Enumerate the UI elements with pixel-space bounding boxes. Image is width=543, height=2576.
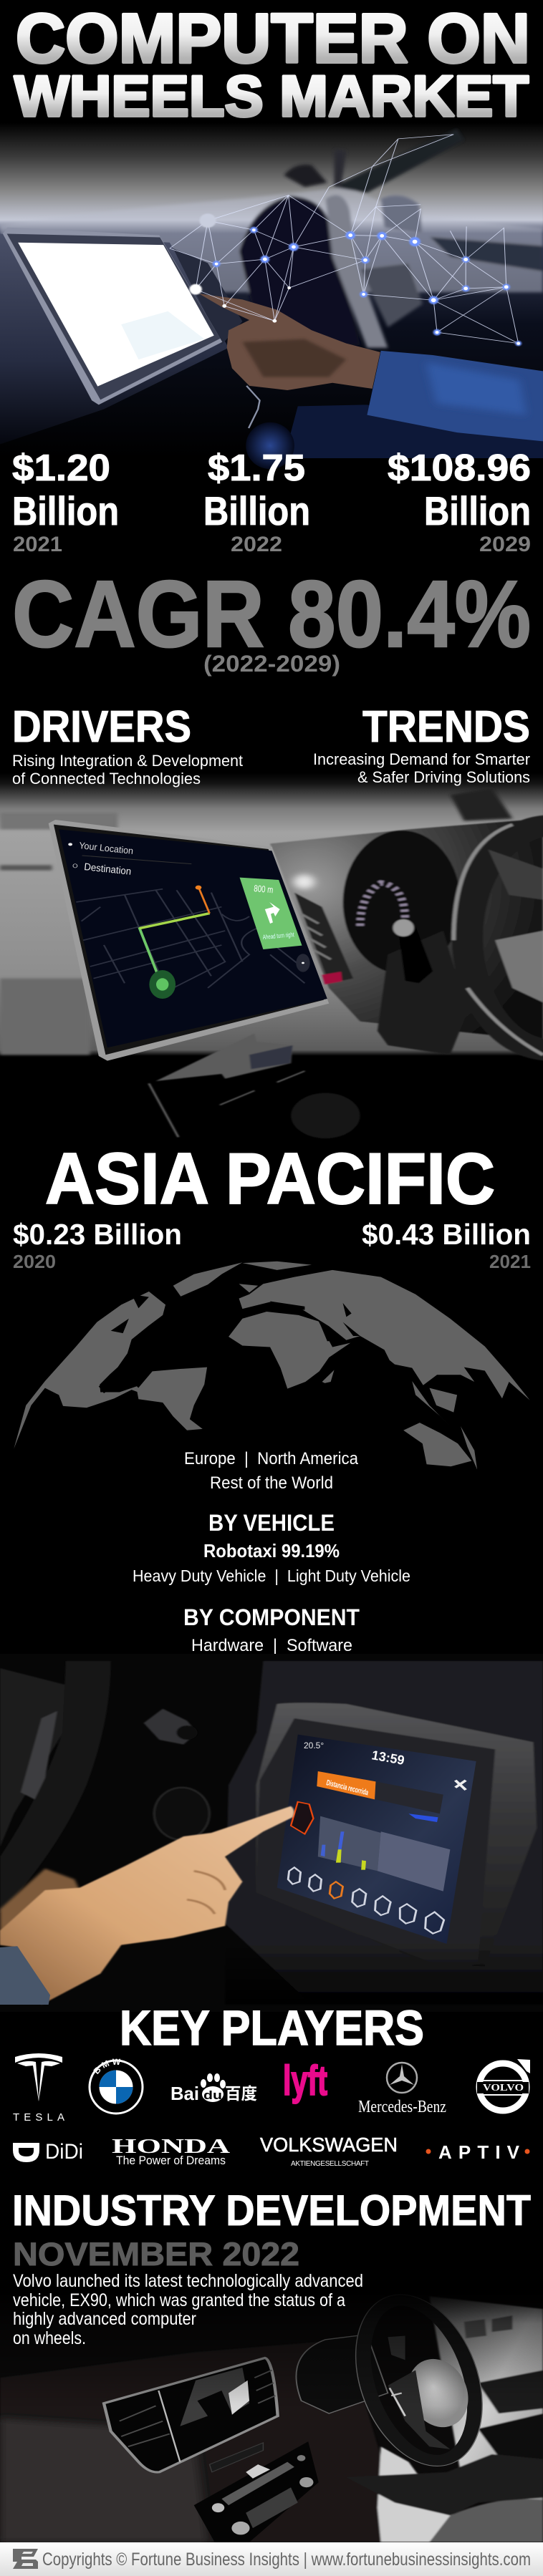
logo: Volkswagen xyxy=(260,2134,398,2168)
trends: Increasing Demand for Smarter xyxy=(313,750,530,768)
lower fade xyxy=(225,1942,543,2005)
development description: on wheels. xyxy=(13,2328,86,2348)
door panel xyxy=(429,2296,543,2508)
drivers xyxy=(12,702,243,788)
top fade xyxy=(0,2289,543,2406)
photo: car interior monochrome xyxy=(0,2286,543,2542)
door sill and seat xyxy=(378,2446,453,2542)
logo: Honda: HONDA xyxy=(112,2136,231,2158)
steering wheel rim xyxy=(0,1661,111,1914)
development description xyxy=(13,2271,363,2348)
logo: Baidu: du xyxy=(203,2088,222,2102)
market size stat 2029: 2029 xyxy=(479,533,531,556)
CAGR: (2022-2029) xyxy=(203,651,340,677)
region stat 2020 xyxy=(13,1218,182,1272)
market size stat 2029 xyxy=(388,447,531,556)
photo: car navigation tablet xyxy=(0,773,543,1138)
on-screen labels: Distancia recorrida xyxy=(325,1778,370,1798)
gear knob xyxy=(246,422,294,469)
logo: DiDi: DiDi xyxy=(45,2140,83,2164)
development description: vehicle, EX90, which was granted the status of a xyxy=(13,2290,345,2310)
screen bezel xyxy=(256,1718,495,1969)
logo: DiDi xyxy=(13,2140,83,2164)
segment: by vehicle: Robotaxi 99.19% xyxy=(203,1540,340,1561)
logo: Honda: The Power of Dreams xyxy=(116,2154,226,2167)
segment: by component: Hardware | Software xyxy=(191,1636,352,1655)
air vent xyxy=(294,893,353,983)
right dashboard xyxy=(270,818,543,1040)
logo: Volvo xyxy=(477,2059,530,2111)
on-screen labels xyxy=(304,1740,405,1798)
logo: Baidu xyxy=(170,2073,257,2104)
tablet interface labels: 800 m xyxy=(254,883,274,895)
instrument binnacle xyxy=(296,2335,388,2413)
on-screen labels: 20.5° xyxy=(304,1740,324,1751)
footer xyxy=(0,2542,543,2576)
center console below tablet xyxy=(156,1033,292,1081)
second forearm behind hand xyxy=(0,1869,80,1945)
trends xyxy=(313,702,530,786)
drivers: of Connected Technologies xyxy=(12,770,201,788)
trends: & Safer Driving Solutions xyxy=(357,768,530,786)
heading: key players: KEY PLAYERS xyxy=(120,2000,424,2056)
development description: highly advanced computer xyxy=(13,2309,196,2329)
logo: Volkswagen: AKTIENGESELLSCHAFT xyxy=(291,2160,369,2168)
instrument cluster xyxy=(343,831,461,974)
on-screen labels: 13:59 xyxy=(370,1748,405,1768)
logo: BMW: B M W xyxy=(93,2059,120,2075)
icon: Fortune Business Insights logo xyxy=(13,2549,38,2569)
photo: hand touching car tablet with network overlay xyxy=(0,122,543,469)
green direction card xyxy=(240,878,302,949)
segment: by vehicle xyxy=(133,1510,410,1585)
world map globe xyxy=(14,1262,530,1470)
drivers: Rising Integration & Development xyxy=(12,752,243,770)
tablet interface labels: Your Location xyxy=(79,840,134,856)
dashboard surface xyxy=(0,2340,381,2542)
market size stat 2022: 2022 xyxy=(231,533,282,556)
bright reflection xyxy=(294,875,314,889)
market size stat 2022: $1.75 xyxy=(208,447,305,489)
shirt cuff xyxy=(0,1946,50,2005)
drivers: DRIVERS xyxy=(12,702,191,752)
other regions: Rest of the World xyxy=(210,1473,333,1493)
market size stat 2021: 2021 xyxy=(13,533,62,556)
logo: Aptiv: APTIV xyxy=(438,2141,520,2163)
market size stat 2029: Billion xyxy=(424,488,531,533)
trends: TRENDS xyxy=(362,702,530,752)
title: COMPUTER ON xyxy=(16,0,530,77)
logo: Baidu: Bai xyxy=(170,2083,199,2104)
tablet screen xyxy=(18,243,214,387)
red hazard button xyxy=(322,972,342,984)
region stat 2020: 2020 xyxy=(13,1251,56,1272)
market size stat 2022 xyxy=(203,447,310,556)
logo: Tesla: TESLA xyxy=(13,2111,64,2124)
segment: by component xyxy=(183,1604,360,1655)
logo: Mercedes-Benz: Mercedes-Benz xyxy=(358,2098,446,2116)
network overlay xyxy=(170,135,522,346)
sleeve xyxy=(284,405,543,458)
other regions xyxy=(184,1449,359,1493)
heading: Asia Pacific: ASIA PACIFIC xyxy=(45,1139,495,1219)
photo: finger touching infotainment screen xyxy=(0,1654,543,2012)
title: WHEELS MARKET xyxy=(14,64,529,129)
indicator stalk xyxy=(144,1709,198,1745)
region stat 2021 xyxy=(362,1218,531,1272)
tablet bezel xyxy=(49,820,329,1061)
infotainment screen xyxy=(277,1735,476,1944)
segment: by vehicle: BY VEHICLE xyxy=(208,1510,335,1536)
tablet interface labels: Destination xyxy=(84,861,132,877)
logo: Mercedes-Benz xyxy=(358,2063,446,2116)
tablet screen with map xyxy=(59,829,327,1047)
segment: by vehicle: Heavy Duty Vehicle | Light Duty Vehicle xyxy=(133,1567,410,1585)
tablet interface labels: Ahead turn right xyxy=(262,931,294,941)
logo: Lyft: lyft xyxy=(283,2058,327,2104)
market size stat 2021 xyxy=(12,447,119,556)
center console controls xyxy=(194,2441,319,2542)
car cabin shapes xyxy=(0,129,543,351)
development description: Volvo launched its latest technologically advanced xyxy=(13,2271,363,2291)
screen and vents panel xyxy=(104,2358,278,2472)
market size stat 2021: $1.20 xyxy=(12,447,110,489)
steering wheel xyxy=(336,2286,502,2475)
pointing hand xyxy=(0,1806,294,2005)
dashboard xyxy=(225,1661,543,2005)
market size stat 2022: Billion xyxy=(203,488,310,533)
logo: BMW xyxy=(89,2059,143,2115)
logo: Volkswagen: VOLKSWAGEN xyxy=(260,2134,398,2156)
logo: Volvo: VOLVO xyxy=(483,2083,524,2093)
steering wheel xyxy=(453,825,543,1055)
logo: Tesla xyxy=(13,2053,64,2124)
left dashboard xyxy=(0,234,229,444)
region stat 2020: $0.23 Billion xyxy=(13,1218,182,1251)
market size stat 2029: $108.96 xyxy=(388,447,531,489)
tablet interface labels xyxy=(79,840,294,941)
tablet bezel xyxy=(3,228,222,405)
other regions: Europe | North America xyxy=(184,1449,359,1468)
market size stat 2021: Billion xyxy=(12,488,119,533)
logo: Baidu: 百度 xyxy=(225,2080,257,2104)
date: November 2022: NOVEMBER 2022 xyxy=(13,2236,299,2272)
segment: by component: BY COMPONENT xyxy=(183,1604,360,1630)
logo: Honda xyxy=(112,2136,231,2167)
title xyxy=(14,0,530,129)
region stat 2021: 2021 xyxy=(489,1251,531,1272)
region stat 2021: $0.43 Billion xyxy=(362,1218,531,1251)
hand xyxy=(199,294,380,390)
